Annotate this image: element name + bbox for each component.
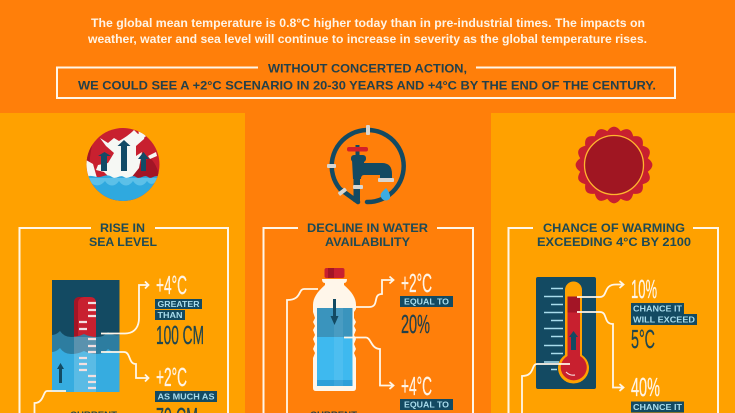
heading — [537, 223, 691, 249]
label: +4C greater than 100 cm — [155, 270, 204, 350]
label: 40% chance: 40% — [631, 372, 660, 402]
callout: without concerted action: WITHOUT CONCERTED ACTION, — [268, 62, 467, 76]
heading: DECLINE IN WATER — [307, 223, 429, 235]
chart: water bottle — [313, 268, 356, 391]
callout: without concerted action: WE COULD SEE A +2°C SCENARIO IN 20-30 YEARS AND +4°C BY THE END OF THE CENTURY. — [78, 78, 656, 92]
arrow: current — [34, 391, 66, 413]
label: +4C greater than 100 cm: +4°C — [156, 270, 187, 300]
label: +2C equal to 20%: EQUAL TO — [404, 298, 449, 306]
arrow: 40% — [577, 312, 624, 391]
label: 10% will exceed 5C: 5°C — [631, 324, 655, 354]
heading: CHANCE OF WARMING — [543, 223, 685, 235]
label: +4C greater than 100 cm: GREATER — [158, 300, 200, 309]
label: 10% will exceed 5C: CHANCE IT — [633, 304, 682, 314]
chart: thermometer — [536, 277, 596, 389]
label: +2C as much as 70 cm — [155, 362, 217, 413]
label: +4C greater than 100 cm: 100 CM — [156, 320, 204, 350]
label: +2C equal to 20% — [400, 268, 453, 339]
arrow: +2C — [353, 276, 394, 307]
label: 10% will exceed 5C: WILL EXCEED — [633, 316, 695, 324]
label: +4C equal to — [400, 371, 453, 410]
panel: decline in water availability — [264, 125, 473, 413]
panel: rise in sea level — [0, 113, 245, 413]
arrow: +4C — [344, 338, 394, 389]
callout: without concerted action — [57, 62, 675, 98]
arrow: current — [287, 289, 318, 413]
label: +4C equal to: EQUAL TO — [404, 400, 449, 410]
frame — [264, 228, 473, 413]
heading — [307, 223, 429, 249]
icon: globe with rising sea — [86, 128, 160, 202]
heading: EXCEEDING 4°C BY 2100 — [537, 237, 691, 249]
intro text: weather, water and sea level will continue to increase in severity as the global temperature rises. — [87, 32, 647, 46]
label: 10% will exceed 5C: 10% — [631, 274, 657, 304]
label: +4C equal to: +4°C — [401, 371, 432, 401]
arrow: +4C — [101, 282, 148, 334]
label: +2C equal to 20%: 20% — [401, 309, 430, 339]
label: 10% will exceed 5C — [631, 274, 697, 354]
heading: AVAILABILITY — [325, 237, 410, 249]
panel: chance of warming — [491, 113, 735, 413]
arrow: +2C — [101, 352, 148, 382]
frame — [20, 228, 228, 413]
label: +2C as much as 70 cm: +2°C — [156, 362, 187, 392]
arrow: 10% — [577, 281, 624, 297]
label: +2C equal to 20%: +2°C — [401, 268, 432, 298]
chart: sea level gauge — [52, 280, 120, 392]
label: +4C greater than 100 cm: THAN — [158, 311, 183, 320]
intro text: The global mean temperature is 0.8°C higher today than in pre-industrial times. The impacts on — [91, 16, 645, 30]
heading: RISE IN — [100, 223, 145, 235]
heading: SEA LEVEL — [89, 237, 157, 249]
icon: dripping tap — [327, 125, 404, 202]
frame — [508, 228, 718, 413]
label: 40% chance: CHANCE IT — [633, 403, 682, 412]
intro text — [87, 16, 647, 46]
label: +2C as much as 70 cm: AS MUCH AS — [158, 392, 215, 402]
icon: sun seal — [576, 127, 652, 203]
heading — [89, 223, 157, 249]
arrow: current — [522, 364, 570, 413]
